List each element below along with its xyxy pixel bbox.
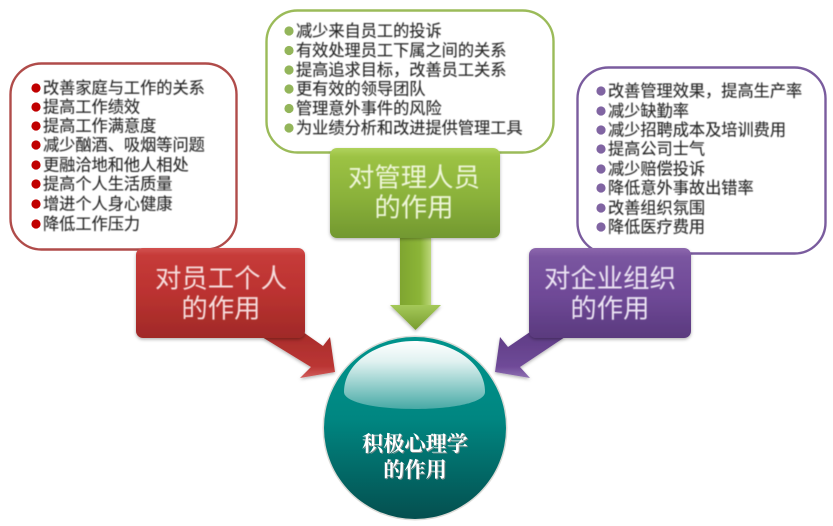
- list: employee benefits: [31, 80, 205, 234]
- box: organizations heading: [529, 248, 691, 338]
- box: managers heading: [330, 148, 500, 238]
- list: employee benefits: 增进个人身心健康: [43, 196, 172, 214]
- arrow: green to center: [390, 236, 441, 330]
- box: employees heading: 的作用: [181, 294, 261, 324]
- list: employee benefits: 降低工作压力: [43, 216, 140, 234]
- list: manager benefits: 有效处理员工下属之间的关系: [296, 42, 506, 60]
- center label: 的作用: [383, 458, 447, 482]
- list: manager benefits: 为业绩分析和改进提供管理工具: [296, 120, 523, 138]
- list: organization benefits: 降低意外事故出错率: [608, 178, 754, 198]
- panel: benefits for employees: [10, 64, 236, 250]
- gloss highlight: [344, 341, 485, 409]
- list: organization benefits: 减少缺勤率: [608, 102, 689, 120]
- list: manager benefits: [284, 22, 523, 138]
- list: organization benefits: 减少招聘成本及培训费用: [608, 122, 786, 140]
- list: employee benefits: 改善家庭与工作的关系: [43, 80, 205, 98]
- center label: 积极心理学: [362, 432, 468, 456]
- box: managers heading: 的作用: [374, 192, 454, 222]
- box: employees heading: 对员工个人: [155, 264, 287, 294]
- list: organization benefits: 改善管理效果，提高生产率: [608, 82, 802, 100]
- list: organization benefits: 降低医疗费用: [608, 218, 705, 236]
- list: organization benefits: 减少赔偿投诉: [608, 160, 705, 178]
- list: employee benefits: 更融洽地和他人相处: [43, 156, 189, 174]
- list: employee benefits: 提高个人生活质量: [43, 176, 172, 194]
- box: organizations heading: 的作用: [570, 294, 650, 324]
- center circle: [322, 336, 508, 520]
- center label: 积极心理学: [363, 433, 469, 457]
- box: organizations heading: 对企业组织: [544, 264, 676, 294]
- list: organization benefits: [596, 82, 802, 236]
- list: employee benefits: 减少酗酒、吸烟等问题: [43, 136, 205, 154]
- arrow: purple to center: [495, 332, 565, 378]
- list: organization benefits: 提高公司士气: [608, 140, 705, 158]
- list: manager benefits: 更有效的领导团队: [296, 80, 426, 98]
- list: manager benefits: 提高追求目标，改善员工关系: [296, 62, 506, 80]
- panel: benefits for managers: [266, 10, 554, 152]
- list: manager benefits: 管理意外事件的风险: [296, 99, 442, 118]
- box: managers heading: 对管理人员: [348, 162, 480, 192]
- arrow: red to center: [262, 332, 335, 378]
- list: employee benefits: 提高工作满意度: [43, 116, 156, 136]
- list: organization benefits: 改善组织氛围: [608, 200, 705, 218]
- box: employees heading: [136, 248, 305, 338]
- list: employee benefits: 提高工作绩效: [43, 98, 140, 116]
- center label: 的作用: [384, 459, 448, 483]
- list: manager benefits: 减少来自员工的投诉: [296, 22, 442, 40]
- center label: [362, 432, 469, 483]
- panel: benefits for organizations: [578, 68, 826, 254]
